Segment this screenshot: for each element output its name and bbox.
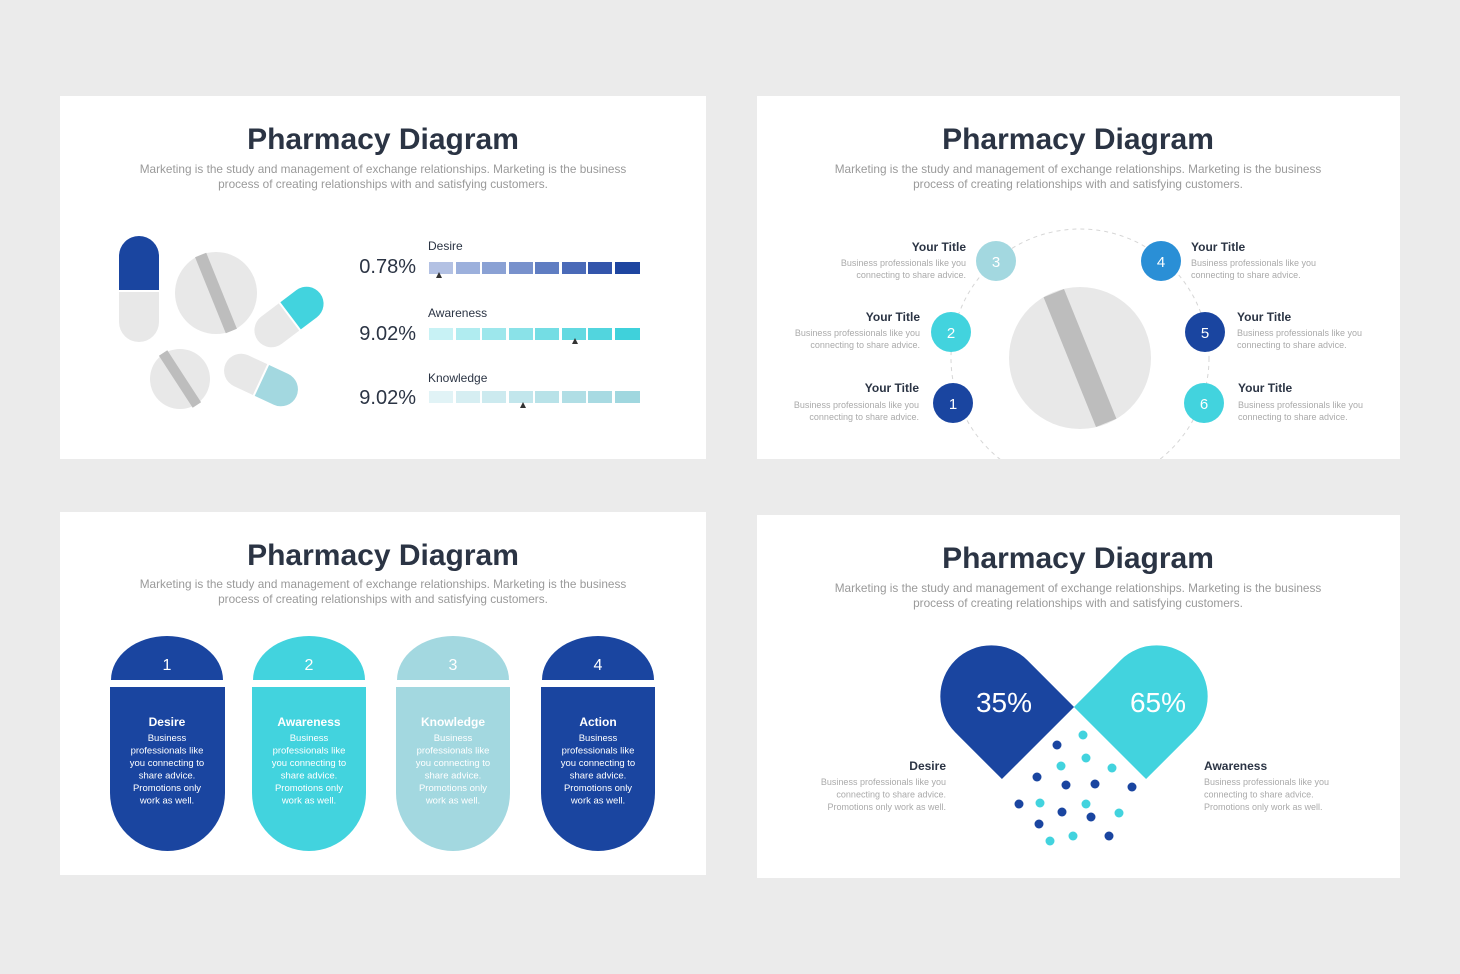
item 3: Business professionals like you [841, 258, 966, 268]
bar: awareness: Awareness [428, 306, 487, 320]
item 1: Your Title [865, 381, 919, 395]
panel: capsule steps [60, 512, 706, 875]
icon: capsule vertical [119, 236, 159, 342]
title: Pharmacy Diagram [247, 123, 519, 156]
item 3: 3 [992, 254, 1000, 271]
item 5: connecting to share advice. [1237, 340, 1347, 350]
step 2: Business [290, 733, 328, 744]
item 2: Business professionals like you [795, 328, 920, 338]
step 3: Promotions only [419, 783, 487, 794]
panel: bars [60, 96, 706, 459]
subtitle: process of creating relationships with and satisfying customers. [913, 177, 1243, 191]
subtitle: Marketing is the study and management of exchange relationships. Marketing is the business [835, 162, 1321, 176]
step 2 [252, 636, 366, 851]
step 1: share advice. [139, 770, 195, 782]
text: awareness: connecting to share advice. [1204, 790, 1314, 800]
bar: desire [359, 239, 640, 278]
item 4: Business professionals like you [1191, 258, 1316, 268]
icon: big tablet [175, 252, 257, 334]
bar: desire: 0.78% [359, 256, 416, 278]
text: desire: connecting to share advice. [836, 790, 946, 800]
step 2: professionals like [273, 746, 345, 756]
subtitle: process of creating relationships with and satisfying customers. [218, 177, 548, 191]
item 5: Your Title [1237, 310, 1292, 324]
item 2: 2 [947, 325, 955, 342]
item 4 [1141, 240, 1316, 281]
text: awareness: Awareness [1204, 759, 1267, 773]
item 6: Business professionals like you [1238, 400, 1363, 410]
step 1: Business [148, 733, 186, 744]
step 1: 1 [163, 657, 172, 674]
item 3 [841, 240, 1016, 281]
step 3: Knowledge [421, 715, 485, 729]
text: desire: Business professionals like you [821, 777, 946, 787]
item 5: 5 [1201, 325, 1209, 342]
title: Pharmacy Diagram [942, 542, 1214, 575]
icon: teal capsule [218, 348, 304, 412]
subtitle: Marketing is the study and management of exchange relationships. Marketing is the business [835, 581, 1321, 595]
step 4: you connecting to [561, 758, 635, 769]
icon: small tablet [150, 349, 210, 409]
icon: central tablet [1009, 287, 1151, 429]
item 2: connecting to share advice. [810, 340, 920, 350]
bar: desire: Desire [428, 239, 463, 253]
subtitle: Marketing is the study and management of exchange relationships. Marketing is the business [140, 577, 626, 591]
title: Pharmacy Diagram [942, 123, 1214, 156]
step 4: work as well. [570, 796, 625, 806]
step 3 [396, 636, 510, 851]
step 1: work as well. [139, 796, 194, 806]
item 4: connecting to share advice. [1191, 270, 1301, 280]
text: awareness: Business professionals like you [1204, 777, 1329, 787]
step 2: Promotions only [275, 783, 343, 794]
step 2: share advice. [281, 770, 337, 782]
capsule half: 35% [919, 624, 1074, 779]
title: Pharmacy Diagram [247, 539, 519, 572]
item 1: connecting to share advice. [809, 412, 919, 422]
step 3: you connecting to [416, 758, 490, 769]
step 1 [110, 636, 225, 851]
panel: split capsule [757, 515, 1400, 878]
step 4: 4 [594, 657, 603, 674]
step 1: Desire [149, 715, 186, 729]
text: desire [821, 759, 946, 812]
item 4: Your Title [1191, 240, 1246, 254]
step 4: Promotions only [564, 783, 632, 794]
bar: knowledge [359, 371, 640, 409]
dots [1014, 730, 1136, 846]
step 4: Action [579, 715, 617, 729]
step 4: share advice. [570, 770, 626, 782]
step 1: you connecting to [130, 758, 204, 769]
item 1: Business professionals like you [794, 400, 919, 410]
text: desire: Promotions only work as well. [827, 802, 946, 812]
step 3: Business [434, 733, 472, 744]
step 4 [541, 636, 655, 851]
step 4: Business [579, 733, 617, 744]
capsule half: 65%: 65% [1130, 687, 1186, 718]
item 6: Your Title [1238, 381, 1293, 395]
step 3: share advice. [425, 770, 481, 782]
item 5: Business professionals like you [1237, 328, 1362, 338]
item 4: 4 [1157, 254, 1165, 271]
text: desire: Desire [909, 759, 946, 773]
item 3: connecting to share advice. [856, 270, 966, 280]
item 2 [795, 310, 971, 352]
bar: awareness [359, 306, 640, 345]
item 1: 1 [949, 396, 957, 413]
step 3: professionals like [417, 746, 489, 756]
capsule half: 65% [1074, 624, 1229, 779]
item 3: Your Title [912, 240, 966, 254]
bar: knowledge: 9.02% [359, 387, 416, 409]
bar: knowledge: Knowledge [428, 371, 488, 385]
step 2: 2 [305, 657, 314, 674]
item 6: 6 [1200, 396, 1208, 413]
item 1 [794, 381, 973, 423]
icon: cyan capsule [248, 280, 330, 354]
step 2: work as well. [281, 796, 336, 806]
item 2: Your Title [866, 310, 920, 324]
item 6 [1184, 381, 1363, 423]
panel: ring [757, 96, 1400, 487]
step 3: work as well. [425, 796, 480, 806]
item 6: connecting to share advice. [1238, 412, 1348, 422]
subtitle: process of creating relationships with and satisfying customers. [913, 596, 1243, 610]
step 4: professionals like [562, 746, 634, 756]
step 3: 3 [449, 657, 458, 674]
subtitle: process of creating relationships with and satisfying customers. [218, 592, 548, 606]
step 1: Promotions only [133, 783, 201, 794]
subtitle: Marketing is the study and management of exchange relationships. Marketing is the business [140, 162, 626, 176]
item 5 [1185, 310, 1362, 352]
text: awareness [1204, 759, 1329, 812]
text: awareness: Promotions only work as well. [1204, 802, 1323, 812]
step 2: Awareness [277, 715, 341, 729]
capsule half: 35%: 35% [976, 687, 1032, 718]
step 2: you connecting to [272, 758, 346, 769]
bar: awareness: 9.02% [359, 323, 416, 345]
step 1: professionals like [131, 746, 203, 756]
